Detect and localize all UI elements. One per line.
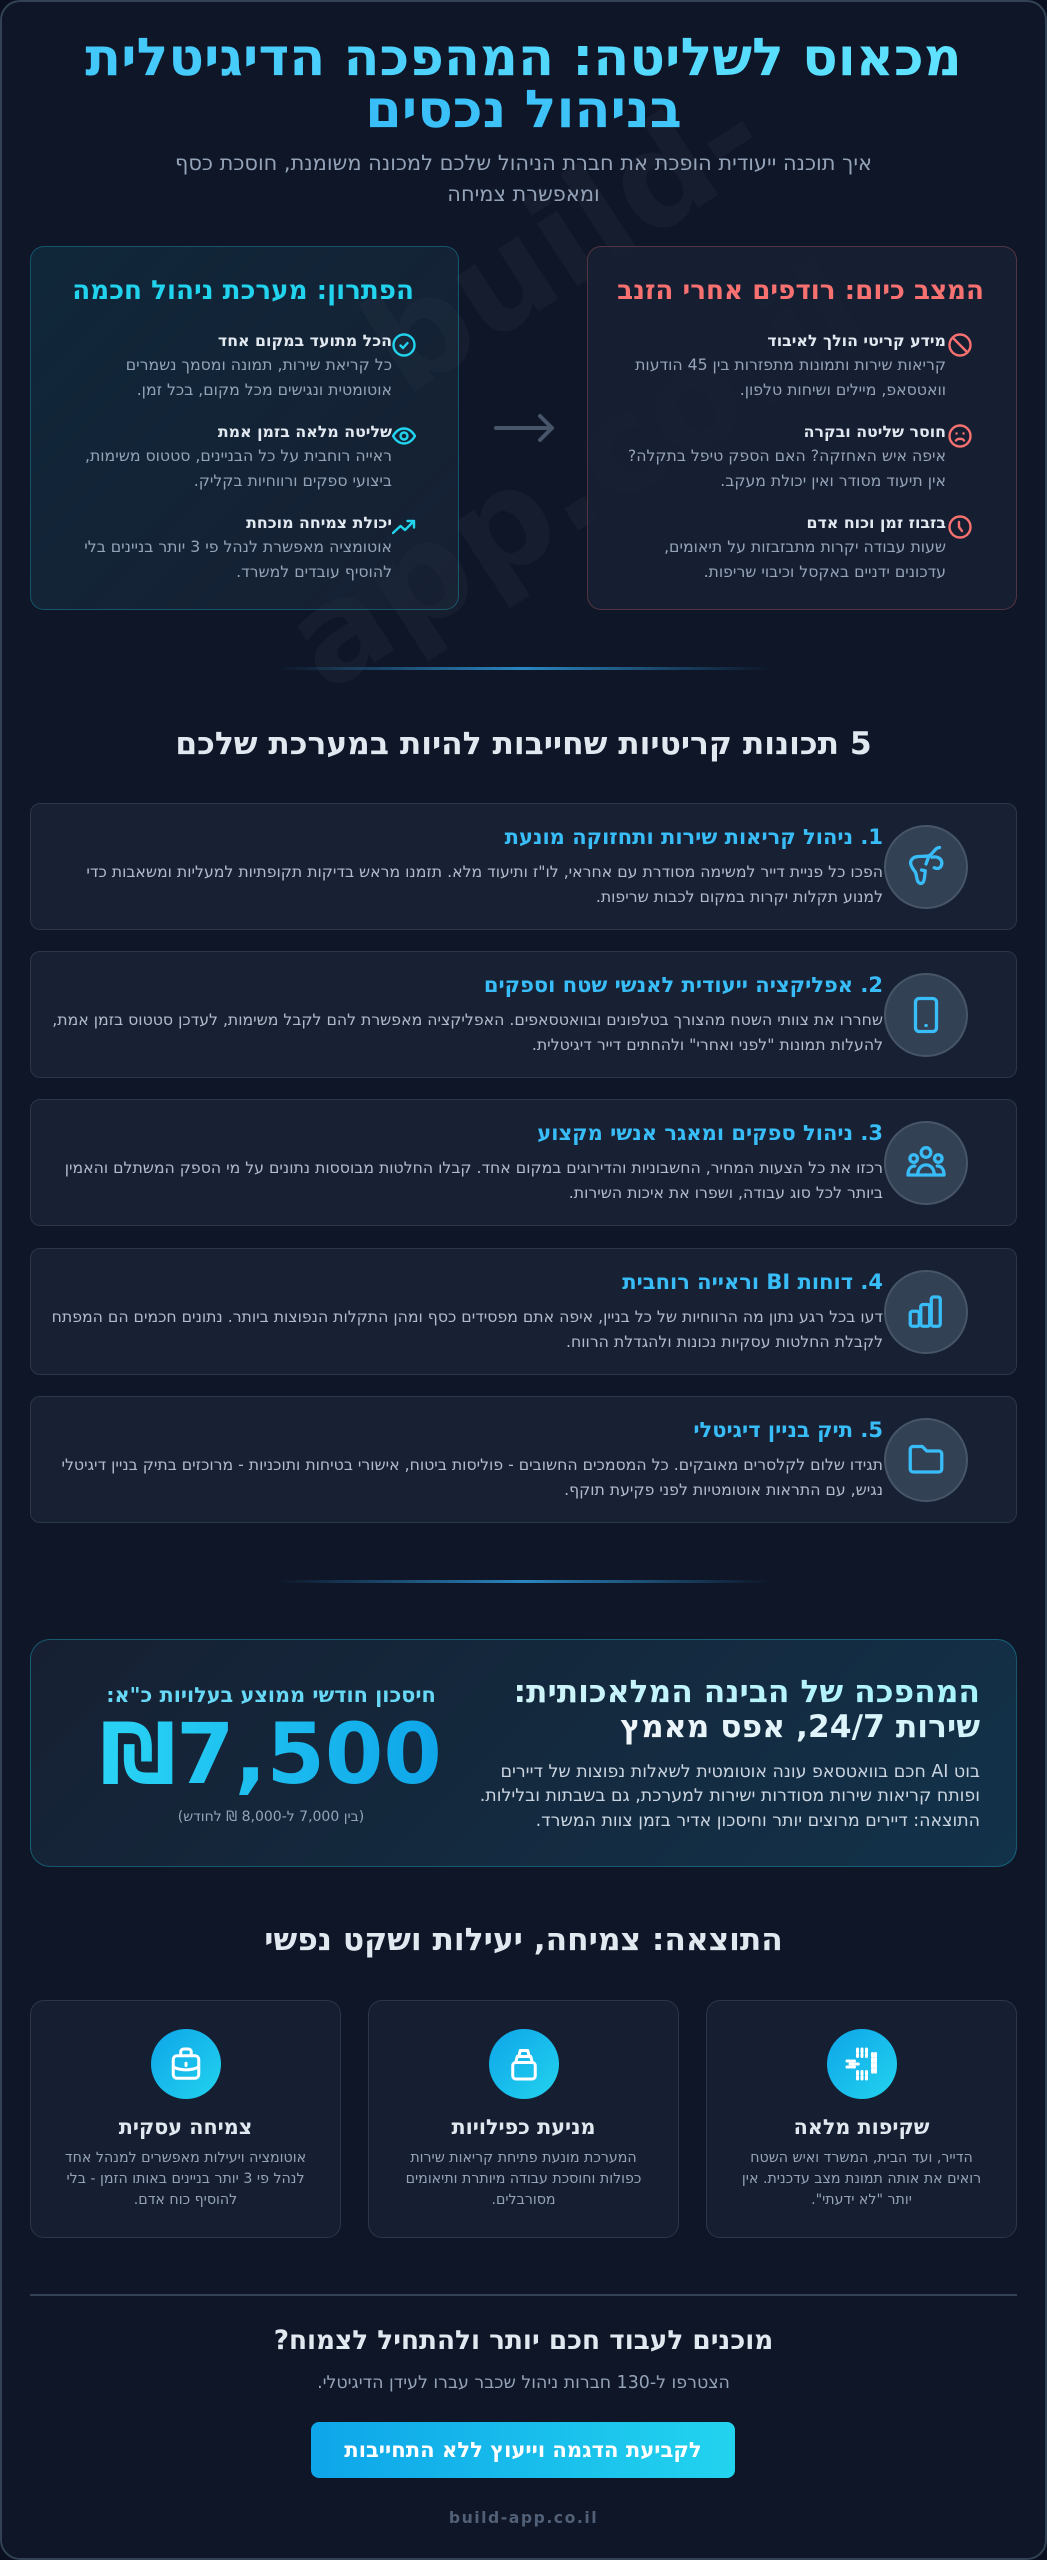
icon: folder [884, 1418, 968, 1502]
feature text [52, 1010, 883, 1054]
item: waste of time: עדכונים ידניים באקסל וכיבוי שריפות. [704, 562, 946, 580]
item: information loss: קריאות שירות ותמונות מתפזרות בין 45 הודעות [635, 355, 946, 374]
call to action text: הצטרפו ל-130 חברות ניהול שכבר עברו לעידן הדיגיטלי. [317, 2373, 730, 2393]
title: מכאוס לשליטה: המהפכה הדיגיטלית [85, 27, 962, 88]
feature text: למנוע תקלות יקרות במקום לכבות שריפות. [596, 886, 883, 906]
icon: sad face [948, 424, 972, 448]
item: everything in one place: הכל מתועד במקום אחד [218, 331, 392, 350]
icon: user group [884, 1121, 968, 1205]
panel heading: current situation: המצב כיום: רודפים אחרי הזנב [617, 276, 984, 306]
card text: מסורבלים. [491, 2192, 556, 2208]
panel: current situation [587, 246, 1017, 610]
feature text [65, 1158, 883, 1202]
card text: יותר "לא ידעתי". [811, 2192, 912, 2208]
panel: the solution [30, 246, 459, 610]
item: lack of control: איפה איש האחזקה? האם הספק טיפל בתקלה? [628, 446, 946, 465]
AI heading [513, 1674, 980, 1745]
panel heading: the solution: הפתרון: מערכת ניהול חכמה [72, 276, 414, 306]
card text: הדייר, ועד הבית, המשרד ואיש השטח [750, 2150, 973, 2166]
feature card 1 [30, 803, 1017, 930]
result card: business growth [30, 2000, 341, 2238]
AI heading: המהפכה של הבינה המלאכותית: [513, 1674, 980, 1710]
feature title: 1. ניהול קריאות שירות ותחזוקה מונעת [505, 825, 883, 849]
savings amount: ₪7,500 [100, 1705, 442, 1803]
item: proven growth: אוטומציה מאפשרת לנהל פי 3 יותר בניינים בלי [84, 537, 392, 556]
feature card 2 [30, 951, 1017, 1078]
icon: chip [827, 2029, 897, 2099]
card text [65, 2150, 306, 2208]
feature text: שחררו את צוותי השטח מהצורך בטלפונים ובוואטסאפים. האפליקציה מאפשרת להם לקבל משימות, לעדכן סטטוס בזמן אמת, [52, 1010, 883, 1029]
item: lack of control: חוסר שליטה ובקרה [804, 422, 946, 441]
subtitle: ומאפשרת צמיחה [447, 182, 600, 206]
card text: לנהל פי 3 יותר בניינים באותו הזמן - בלי [66, 2171, 305, 2187]
card text: רואים את אותה תמונת מצב עדכנית. אין [742, 2171, 981, 2187]
icon: wrench [884, 825, 968, 909]
feature text: תגידו שלום לקלסרים מאובקים. כל המסמכים החשובים - פוליסות ביטוח, אישורי בטיחות ותוכניות - מרוכזים בתיק בניין דיגיטלי [61, 1455, 883, 1474]
watermark [0, 0, 1047, 1100]
call to action button [311, 2422, 735, 2478]
item: information loss: מידע קריטי הולך לאיבוד [767, 331, 946, 350]
item: everything in one place: כל קריאת שירות, תמונה ומסמך נשמרים [126, 355, 392, 374]
call to action heading: מוכנים לעבוד חכם יותר ולהתחיל לצמוח? [274, 2326, 773, 2356]
icon: bar chart [884, 1270, 968, 1354]
item: information loss: וואטסאפ, מיילים ושיחות טלפון. [740, 380, 946, 398]
feature text: לקבלת החלטות עסקיות נכונות ולהגדלת הרווח. [566, 1332, 883, 1350]
icon: eye [392, 427, 416, 445]
icon: clock [948, 515, 972, 539]
feature card 5 [30, 1396, 1017, 1523]
subtitle [175, 151, 872, 206]
arrow: from problem to solution [494, 414, 554, 442]
item: proven growth: יכולת צמיחה מוכחת [246, 513, 392, 532]
AI text: התוצאה: דיירים מרוצים יותר וחיסכון אדיר בזמן צוות המשרד. [536, 1811, 980, 1831]
feature text: ביותר לכל סוג עבודה, ושפרו את איכות השירות. [569, 1182, 883, 1202]
feature text [52, 1307, 883, 1350]
feature title: 4. דוחות BI וראייה רוחבית [622, 1270, 883, 1294]
call to action button: לקביעת הדגמה וייעוץ ללא התחייבות [344, 2437, 702, 2462]
card title: מניעת כפילויות [452, 2115, 595, 2139]
watermark: build- [337, 53, 793, 426]
AI text: ופותח קריאות שירות מסודרות ישירות למערכת, גם בשבתות ובלילות. [480, 1786, 980, 1806]
feature card 4 [30, 1248, 1017, 1375]
title: בניהול נכסים [365, 79, 682, 140]
feature text [61, 1455, 883, 1498]
feature text: דעו בכל רגע נתון מה הרווחיות של כל בניין, איפה אתם מפסידים כסף ומהן התקלות הנפוצות ביותר. נתונים חכמים הם המפתח [52, 1307, 883, 1326]
card title: שקיפות מלאה [794, 2115, 929, 2139]
feature text: רכזו את כל הצעות המחיר, החשבוניות והדירוגים במקום אחד. קבלו החלטות מבוססות נתונים על מי הספק המשתלם והאמין [65, 1158, 883, 1177]
card text [742, 2150, 981, 2208]
icon: trending up [392, 520, 416, 534]
AI heading: שירות 24/7, אפס מאמץ [620, 1709, 980, 1745]
card title: צמיחה עסקית [119, 2115, 252, 2139]
card text: כפולות וחוסכת עבודה מיותרת ותיאומים [406, 2171, 641, 2187]
icon: stack [489, 2029, 559, 2099]
footer website: build-app.co.il [449, 2508, 598, 2527]
item: lack of control: אין תיעוד מסודר ואין יכולת מעקב. [720, 470, 946, 490]
item: waste of time: שעות עבודה יקרות מתבזבזות על תיאומים, [664, 537, 946, 556]
savings label: חיסכון חודשי ממוצע בעלויות כ"א: [106, 1683, 436, 1707]
result card: preventing duplicates [368, 2000, 679, 2238]
title [85, 27, 962, 140]
feature card 3 [30, 1099, 1017, 1226]
item: full real-time control: ביצועי ספקים ורווחיות בקליק. [194, 470, 392, 490]
item: waste of time [664, 513, 972, 580]
card text: המערכת מונעת פתיחת קריאות שירות [410, 2150, 637, 2166]
feature text: נגיש, עם התראות אוטומטיות לפני פקיעת תוקף. [564, 1480, 883, 1498]
subtitle: איך תוכנה ייעודית הופכת את חברת הניהול שלכם למכונה משומנת, חוסכת כסף [175, 151, 872, 175]
feature title: 5. תיק בניין דיגיטלי [693, 1418, 883, 1442]
result card: transparency [706, 2000, 1017, 2238]
item: full real-time control [85, 422, 416, 490]
AI text [480, 1762, 980, 1831]
section heading: features: 5 תכונות קריטיות שחייבות להיות במערכת שלכם [175, 726, 872, 762]
feature text [86, 862, 883, 906]
savings range: (בין 7,000 ל-8,000 ₪ לחודש) [178, 1809, 364, 1825]
feature text: להעלות תמונות "לפני ואחרי" ולהחתים דייר דיגיטלית. [532, 1034, 883, 1054]
item: full real-time control: ראייה רוחבית על כל הבניינים, סטטוס משימות, [85, 446, 392, 465]
section heading: results: התוצאה: צמיחה, יעילות ושקט נפשי [264, 1922, 783, 1958]
item: everything in one place [126, 331, 416, 398]
card text: להוסיף כוח אדם. [134, 2192, 237, 2208]
card text [406, 2150, 641, 2208]
item: full real-time control: שליטה מלאה בזמן אמת [218, 422, 392, 441]
watermark: app.co.il [258, 231, 896, 722]
feature title: 3. ניהול ספקים ומאגר אנשי מקצוע [537, 1121, 883, 1145]
panel: AI revolution [30, 1639, 1017, 1867]
AI text: בוט AI חכם בוואטסאפ עונה אוטומטית לשאלות נפוצות של דיירים [500, 1762, 980, 1782]
item: lack of control [628, 422, 972, 490]
icon: briefcase [151, 2029, 221, 2099]
item: information loss [635, 331, 972, 398]
item: everything in one place: אוטומטית ונגישים מכל מקום, בכל זמן. [137, 380, 392, 398]
feature title: 2. אפליקציה ייעודית לאנשי שטח וספקים [484, 973, 883, 997]
icon: prohibited [948, 333, 972, 357]
item: proven growth [84, 513, 416, 580]
item: waste of time: בזבוז זמן וכוח אדם [807, 513, 946, 532]
item: proven growth: להוסיף עובדים למשרד. [236, 562, 392, 580]
icon: smartphone [884, 973, 968, 1057]
card text: אוטומציה ויעילות מאפשרים למנהל אחד [65, 2150, 306, 2166]
feature text: הפכו כל פניית דייר למשימה מסודרת עם אחראי, לו"ז ותיעוד מלא. תזמנו מראש בדיקות תקופתיות למעליות ומשאבות כדי [86, 862, 883, 881]
icon: check circle [392, 333, 416, 357]
